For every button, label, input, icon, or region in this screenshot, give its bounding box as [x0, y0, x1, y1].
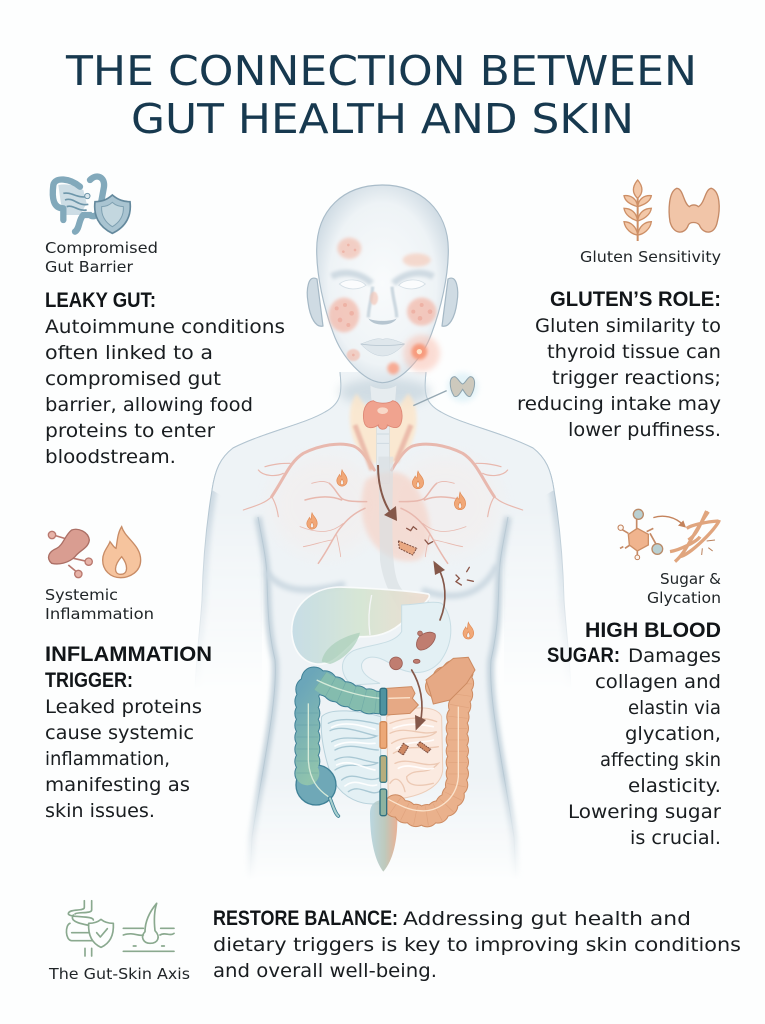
text: high blood sugar: affecting skin: [600, 749, 721, 771]
text: leaky gut: bloodstream.: [45, 446, 176, 468]
text: high blood sugar: Lowering sugar: [568, 801, 721, 823]
rectum: [370, 800, 397, 872]
text: leaky gut: LEAKY GUT:: [45, 289, 156, 312]
title: [65, 47, 697, 143]
label: compromised gut barrier: Gut Barrier: [45, 258, 134, 276]
text: leaky gut: proteins to enter: [45, 420, 215, 442]
orange colon: [388, 669, 463, 816]
text: leaky gut: compromised gut: [45, 368, 221, 390]
facial features: [332, 273, 433, 356]
text: restore balance: RESTORE BALANCE:: [213, 907, 398, 930]
skin rash: [329, 238, 440, 374]
thyroid and neck: [350, 385, 417, 483]
text: inflammation trigger: TRIGGER:: [45, 669, 133, 692]
label: sugar and glycation: Sugar &: [660, 570, 721, 588]
arms: [195, 372, 571, 690]
text: gluten's role: thyroid tissue can: [547, 341, 721, 363]
lung flames: [307, 470, 466, 529]
label: the gut-skin axis: The Gut-Skin Axis: [48, 965, 190, 983]
icon: wheat and thyroid: [624, 180, 719, 241]
panel: high blood sugar: [547, 509, 721, 849]
chest arrow: [378, 465, 397, 521]
abdominal organs: [292, 457, 475, 872]
body illustration: [195, 185, 571, 880]
small intestine left: [321, 711, 381, 804]
text: inflammation trigger: [45, 643, 212, 822]
text: high blood sugar: SUGAR:: [547, 644, 620, 667]
label: sugar and glycation: Glycation: [647, 589, 721, 607]
text: inflammation trigger: INFLAMMATION: [45, 643, 212, 666]
chest contours: [266, 565, 497, 596]
text: gluten's role: GLUTEN’S ROLE:: [550, 288, 721, 311]
text: high blood sugar: elasticity.: [628, 775, 721, 797]
icon: gut-skin axis: [66, 901, 174, 956]
label: gluten sensitivity: Gluten Sensitivity: [580, 248, 721, 266]
center barrier segments: [380, 688, 387, 816]
particles: [407, 527, 473, 585]
text: high blood sugar: glycation,: [625, 723, 721, 745]
panel: leaky gut: [45, 177, 285, 468]
neck shadow: [339, 378, 431, 406]
text: high blood sugar: collagen and: [595, 671, 721, 693]
text: high blood sugar: elastin via: [628, 697, 721, 719]
title: THE CONNECTION BETWEEN: [65, 47, 697, 95]
arrows: [412, 568, 445, 723]
text: leaky gut: [45, 289, 285, 468]
esophagus: [378, 457, 433, 620]
text: leaky gut: Autoimmune conditions: [45, 316, 285, 338]
text: gluten's role: [517, 288, 721, 441]
text: restore balance: and overall well-being.: [213, 960, 437, 982]
head: [317, 185, 478, 483]
liver: [292, 587, 429, 664]
text: high blood sugar: HIGH BLOOD: [585, 619, 721, 642]
text: inflammation trigger: cause systemic: [45, 722, 194, 744]
ears: [307, 278, 458, 326]
neck glow trunk: [355, 425, 411, 470]
flame by stomach: [463, 622, 474, 639]
bronchial branches left: [243, 444, 374, 563]
torso silhouette: [212, 372, 554, 880]
label: compromised gut barrier: [45, 239, 158, 276]
text: gluten's role: reducing intake may: [517, 393, 721, 415]
text: high blood sugar: Damages: [628, 645, 721, 667]
text: leaky gut: often linked to a: [45, 342, 213, 364]
label: systemic inflammation: Systemic: [45, 586, 118, 604]
thyroid inset: [413, 373, 478, 406]
label: compromised gut barrier: Compromised: [45, 239, 158, 257]
label: systemic inflammation: [45, 586, 154, 623]
label: systemic inflammation: Inflammation: [45, 605, 154, 623]
panel: restore balance: [48, 901, 741, 983]
text: high blood sugar: is crucial.: [630, 827, 721, 849]
bronchial branches right: [392, 444, 523, 563]
label: sugar and glycation: [647, 570, 721, 607]
icon: compromised gut and shield: [53, 177, 130, 233]
blue colon: [296, 679, 380, 816]
text: gluten's role: trigger reactions;: [552, 367, 721, 389]
title: GUT HEALTH AND SKIN: [131, 95, 634, 143]
gallbladder: [322, 633, 360, 664]
text: restore balance: Addressing gut health and: [403, 908, 691, 930]
lung area and heart: [270, 455, 500, 561]
text: high blood sugar: [547, 619, 721, 849]
text: inflammation trigger: skin issues.: [45, 800, 155, 822]
text: gluten's role: lower puffiness.: [568, 419, 721, 441]
small intestine right: [387, 708, 443, 800]
text: restore balance: dietary triggers is key to improving skin conditions: [213, 934, 741, 956]
text: inflammation trigger: inflammation,: [45, 748, 170, 770]
icon: inflammation molecule and flame: [48, 527, 141, 578]
panel: gluten's role: [517, 180, 721, 441]
text: inflammation trigger: Leaked proteins: [45, 696, 202, 718]
text: restore balance: [213, 907, 741, 982]
text: leaky gut: barrier, allowing food: [45, 394, 253, 416]
gut bacteria: [390, 631, 435, 670]
text: inflammation trigger: manifesting as: [45, 774, 190, 796]
text: gluten's role: Gluten similarity to: [535, 315, 721, 337]
icon: sugar molecule and damaged collagen: [618, 509, 719, 562]
intestine bacteria: [398, 742, 431, 755]
stomach: [342, 602, 451, 685]
panel: inflammation trigger: [45, 527, 212, 822]
